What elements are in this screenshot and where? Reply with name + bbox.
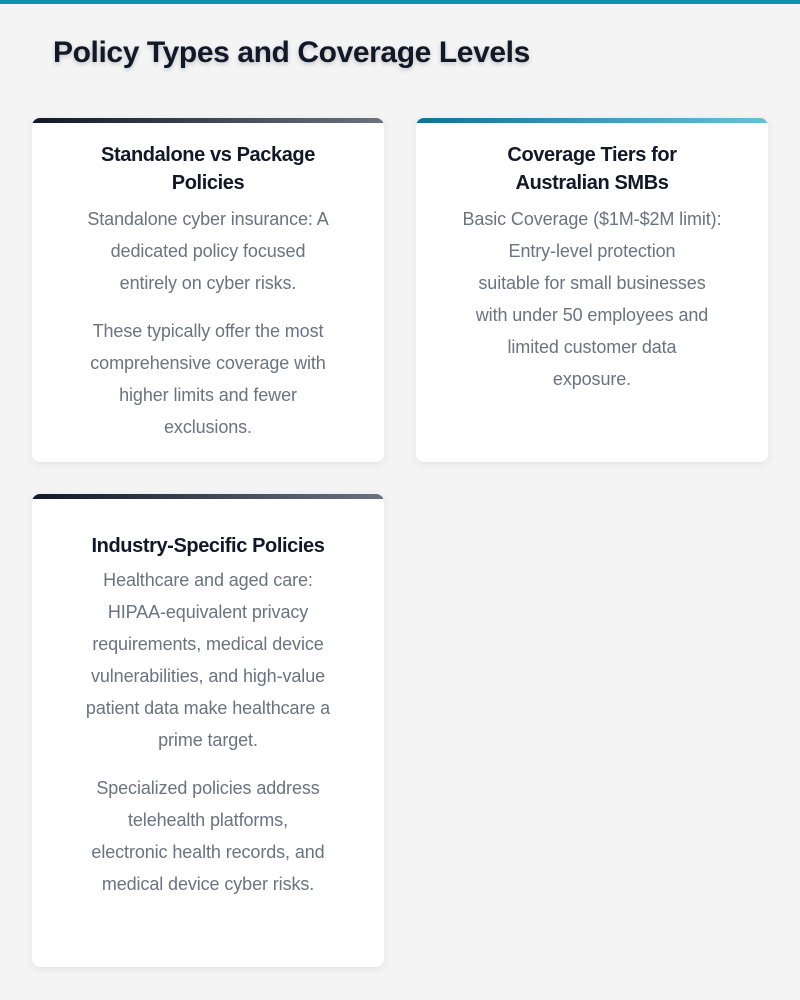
heading: coverage tiers: Australian SMBs (516, 172, 668, 194)
heading: standalone: Policies (172, 172, 244, 194)
panel: standalone vs package (32, 118, 384, 462)
heading: coverage tiers (507, 144, 677, 194)
text: basic coverage: Entry-level protection (509, 241, 675, 261)
panel: industry-specific (32, 494, 384, 967)
text: healthcare: Healthcare and aged care: (103, 570, 313, 590)
text: healthcare: requirements, medical device (92, 634, 324, 654)
text: standalone definition: Standalone cyber insurance: A (87, 209, 329, 229)
text: standalone coverage: These typically offer the most (93, 321, 323, 341)
text: standalone coverage: exclusions. (164, 417, 252, 437)
heading: standalone: Standalone vs Package (101, 144, 315, 166)
title: Policy Types and Coverage Levels (53, 36, 530, 69)
text: specialized policies: Specialized policies address (96, 778, 320, 798)
heading: standalone (101, 144, 315, 194)
text: standalone coverage (90, 321, 326, 437)
text: healthcare: patient data make healthcare a (86, 698, 330, 718)
text: standalone coverage: comprehensive coverage with (90, 353, 326, 373)
text: basic coverage: limited customer data (508, 337, 676, 357)
text: specialized policies: medical device cyber risks. (102, 874, 314, 894)
panel: coverage tiers (416, 118, 768, 462)
text: basic coverage: Basic Coverage ($1M-$2M limit): (462, 209, 721, 229)
heading: coverage tiers: Coverage Tiers for (507, 144, 677, 166)
text: basic coverage (462, 209, 721, 389)
text: basic coverage: suitable for small businesses (478, 273, 706, 293)
text: basic coverage: exposure. (553, 369, 631, 389)
text: standalone definition (87, 209, 329, 293)
text: standalone definition: dedicated policy focused (111, 241, 305, 261)
text: basic coverage: with under 50 employees and (476, 305, 708, 325)
heading: industry-specific: Industry-Specific Policies (91, 535, 324, 557)
text: standalone coverage: higher limits and fewer (119, 385, 297, 405)
text: healthcare: vulnerabilities, and high-value (91, 666, 325, 686)
text: healthcare: HIPAA-equivalent privacy (108, 602, 308, 622)
text: healthcare (86, 570, 330, 750)
text: standalone definition: entirely on cyber risks. (120, 273, 296, 293)
text: specialized policies: telehealth platforms, (128, 810, 288, 830)
text: specialized policies: electronic health records, and (91, 842, 325, 862)
text: healthcare: prime target. (158, 730, 258, 750)
text: specialized policies (91, 778, 325, 894)
